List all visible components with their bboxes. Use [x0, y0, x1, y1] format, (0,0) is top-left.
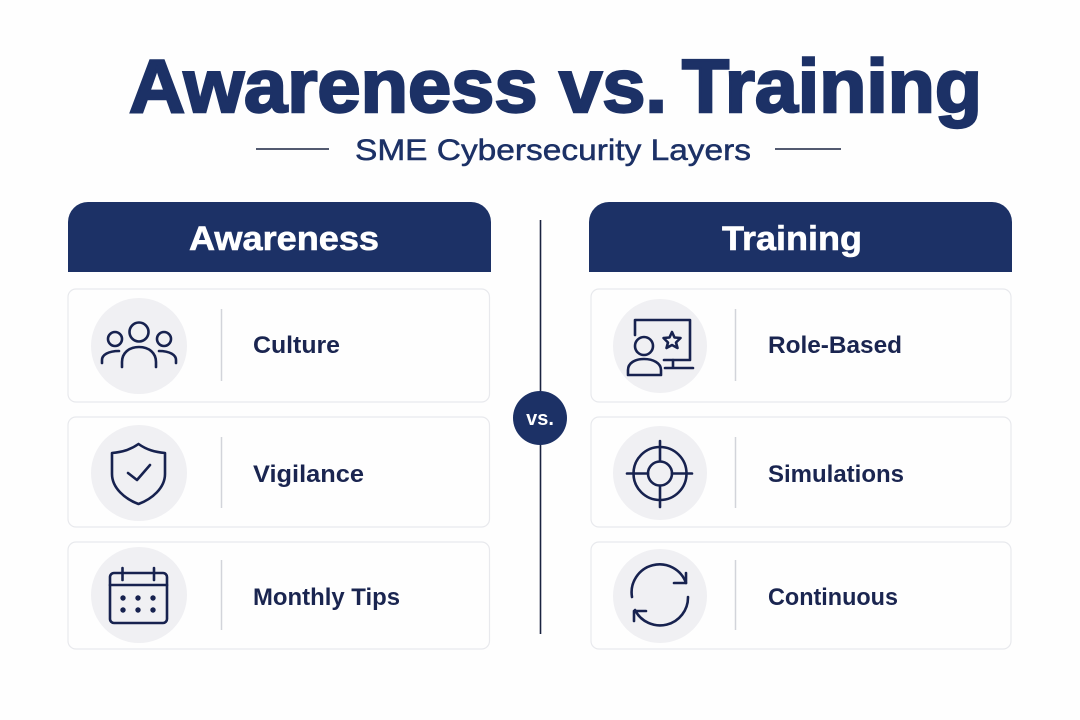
card: Monthly Tips — [68, 542, 490, 649]
title: Awareness vs. — [129, 44, 667, 128]
panel: Awareness — [68, 202, 491, 649]
card: Culture: Culture — [253, 332, 340, 359]
Training header — [589, 202, 1012, 272]
card: Vigilance — [68, 417, 490, 527]
card: Continuous: Continuous — [768, 584, 898, 611]
title: Training — [682, 44, 982, 128]
center divider with vs. badge — [513, 220, 567, 634]
card: Role-Based: Role-Based — [768, 332, 902, 359]
card: Role-Based — [591, 289, 1011, 402]
card: Simulations: Simulations — [768, 461, 904, 488]
Training header: Training — [722, 220, 862, 258]
icon: refresh arrows — [632, 564, 688, 625]
icon: people — [102, 322, 176, 367]
icon: calendar — [110, 568, 167, 623]
title — [129, 44, 982, 128]
card: Monthly Tips: Monthly Tips — [253, 584, 400, 611]
icon: person at screen with star — [628, 320, 693, 375]
icon: target crosshair — [627, 441, 692, 507]
center divider with vs. badge: vs. — [526, 408, 554, 430]
icon: shield with check — [112, 444, 165, 504]
Awareness header — [68, 202, 491, 272]
card: Simulations — [591, 417, 1011, 527]
card: Vigilance: Vigilance — [253, 461, 364, 488]
panel: Training — [589, 202, 1012, 649]
subtitle: SME Cybersecurity Layers — [355, 134, 751, 167]
Awareness header: Awareness — [189, 220, 379, 258]
card: Culture — [68, 289, 490, 402]
card: Continuous — [591, 542, 1011, 649]
